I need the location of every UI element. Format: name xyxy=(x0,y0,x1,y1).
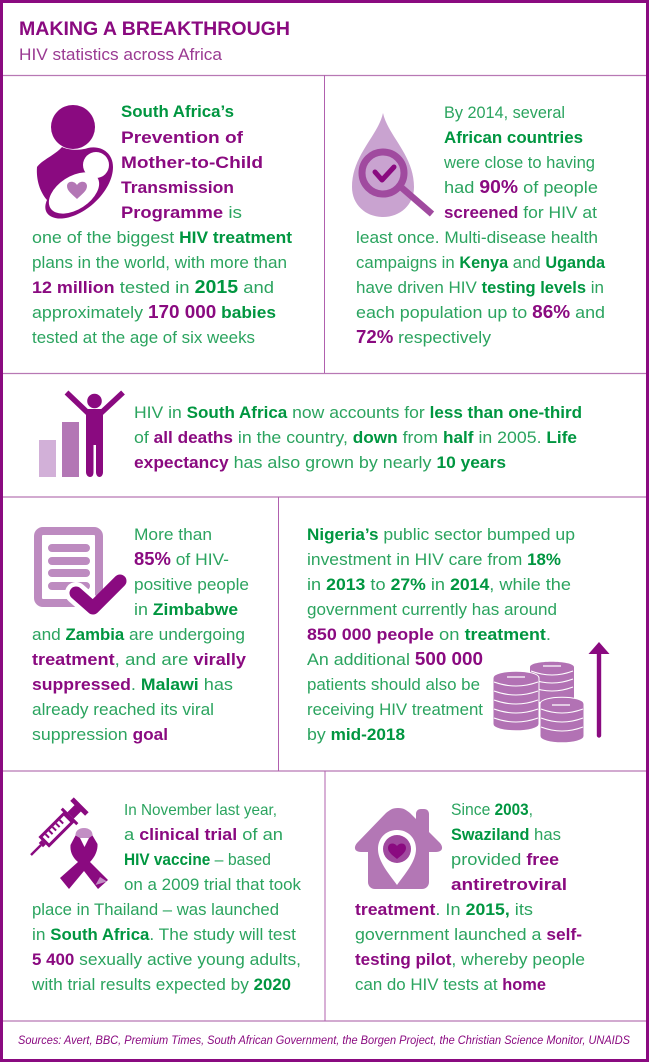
text xyxy=(32,525,249,744)
text: Programme is xyxy=(121,203,242,222)
text: African countries xyxy=(444,129,583,147)
icon: house with location pin xyxy=(355,808,442,889)
text: and Zambia are undergoing xyxy=(32,625,245,644)
text: patients should also be xyxy=(307,675,480,694)
text: government currently has around xyxy=(307,600,557,619)
text: were close to having xyxy=(443,153,595,172)
text: 85% of HIV- xyxy=(134,549,229,569)
panel: Swaziland xyxy=(355,800,585,994)
text: suppressed . Malawi has xyxy=(32,675,233,694)
subtitle: HIV statistics across Africa xyxy=(19,45,223,64)
panel: HIV vaccine trial xyxy=(23,797,301,994)
text: in Zimbabwe xyxy=(134,600,238,619)
text: Swaziland has xyxy=(451,825,561,844)
text: suppression goal xyxy=(32,725,168,744)
text: can do HIV tests at home xyxy=(355,975,546,994)
icon: coin stacks xyxy=(493,662,584,743)
text: tested at the age of six weeks xyxy=(32,328,255,347)
text: plans in the world, with more than xyxy=(32,253,287,272)
icon: syringe and ribbon xyxy=(23,797,108,889)
text: approximately 170 000 babies xyxy=(32,302,276,322)
text: An additional 500 000 xyxy=(307,649,483,669)
icon: blood drop with magnifier xyxy=(352,113,432,217)
text: 850 000 people on treatment . xyxy=(307,625,551,644)
text: Prevention of xyxy=(121,129,244,147)
text: South Africa’s xyxy=(121,103,234,121)
icon: document with check mark xyxy=(38,531,120,608)
text: one of the biggest HIV treatment xyxy=(32,228,293,247)
text: a clinical trial of an xyxy=(124,825,283,844)
text xyxy=(356,103,606,347)
icon: person with bars xyxy=(39,392,123,477)
text xyxy=(32,103,293,347)
text: Nigeria’s public sector bumped up xyxy=(307,525,575,544)
text: By 2014, several xyxy=(444,103,565,122)
text: already reached its viral xyxy=(32,700,214,719)
text: antiretroviral xyxy=(451,876,567,894)
text: 5 400 sexually active young adults, xyxy=(32,950,301,969)
text: in South Africa. The study will test xyxy=(32,925,296,944)
text: had 90% of people xyxy=(444,177,598,197)
text: least once. Multi-disease health xyxy=(356,228,598,247)
panel: deaths and life expectancy xyxy=(39,392,582,477)
text: by mid-2018 xyxy=(307,725,405,744)
text: screened for HIV at xyxy=(444,203,597,222)
text: 72% respectively xyxy=(356,327,492,347)
icon: mother and baby xyxy=(37,105,113,222)
text: treatment , and are virally xyxy=(32,650,247,669)
text: treatment . In 2015, its xyxy=(355,900,533,919)
panel: South Africa mother-to-child xyxy=(32,103,293,347)
text: More than xyxy=(134,525,212,544)
text: investment in HIV care from 18% xyxy=(307,550,561,569)
panel: Nigeria xyxy=(307,525,610,744)
text: testing pilot, whereby people xyxy=(355,950,585,969)
text: each population up to 86% and xyxy=(356,302,605,322)
text: In November last year, xyxy=(124,802,277,819)
text: government launched a self- xyxy=(355,925,582,944)
sources footer: Sources: Avert, BBC, Premium Times, South African Government, the Borgen Project, the Christian Science Monitor, UNAIDS xyxy=(18,1035,630,1047)
text: of all deaths in the country, down from half in 2005. Life xyxy=(134,428,577,447)
text: campaigns in Kenya and Uganda xyxy=(356,253,606,272)
text xyxy=(134,403,582,472)
text: HIV vaccine – based xyxy=(124,850,271,869)
text: on a 2009 trial that took xyxy=(124,875,301,894)
text: in 2013 to 27% in 2014, while the xyxy=(307,575,571,594)
text: Transmission xyxy=(121,179,234,197)
text: receiving HIV treatment xyxy=(307,700,483,719)
arrow: growth xyxy=(588,642,610,738)
text: Mother-to-Child xyxy=(121,154,263,172)
title: MAKING A BREAKTHROUGH xyxy=(19,19,290,40)
panel: Zimbabwe and Zambia xyxy=(32,525,249,744)
text xyxy=(31,802,301,994)
text xyxy=(355,800,585,994)
text: expectancy has also grown by nearly 10 years xyxy=(134,453,506,472)
text: provided free xyxy=(451,850,559,869)
header xyxy=(19,19,290,64)
text xyxy=(307,525,575,744)
text: place in Thailand – was launched xyxy=(32,900,279,919)
text: HIV in South Africa now accounts for less than one-third xyxy=(134,403,582,422)
text: Since 2003, xyxy=(451,800,533,819)
text: positive people xyxy=(134,575,249,594)
text: 12 million tested in 2015 and xyxy=(32,277,274,297)
text: have driven HIV testing levels in xyxy=(356,278,604,297)
text: with trial results expected by 2020 xyxy=(31,975,291,994)
panel: African countries screening xyxy=(352,103,606,347)
